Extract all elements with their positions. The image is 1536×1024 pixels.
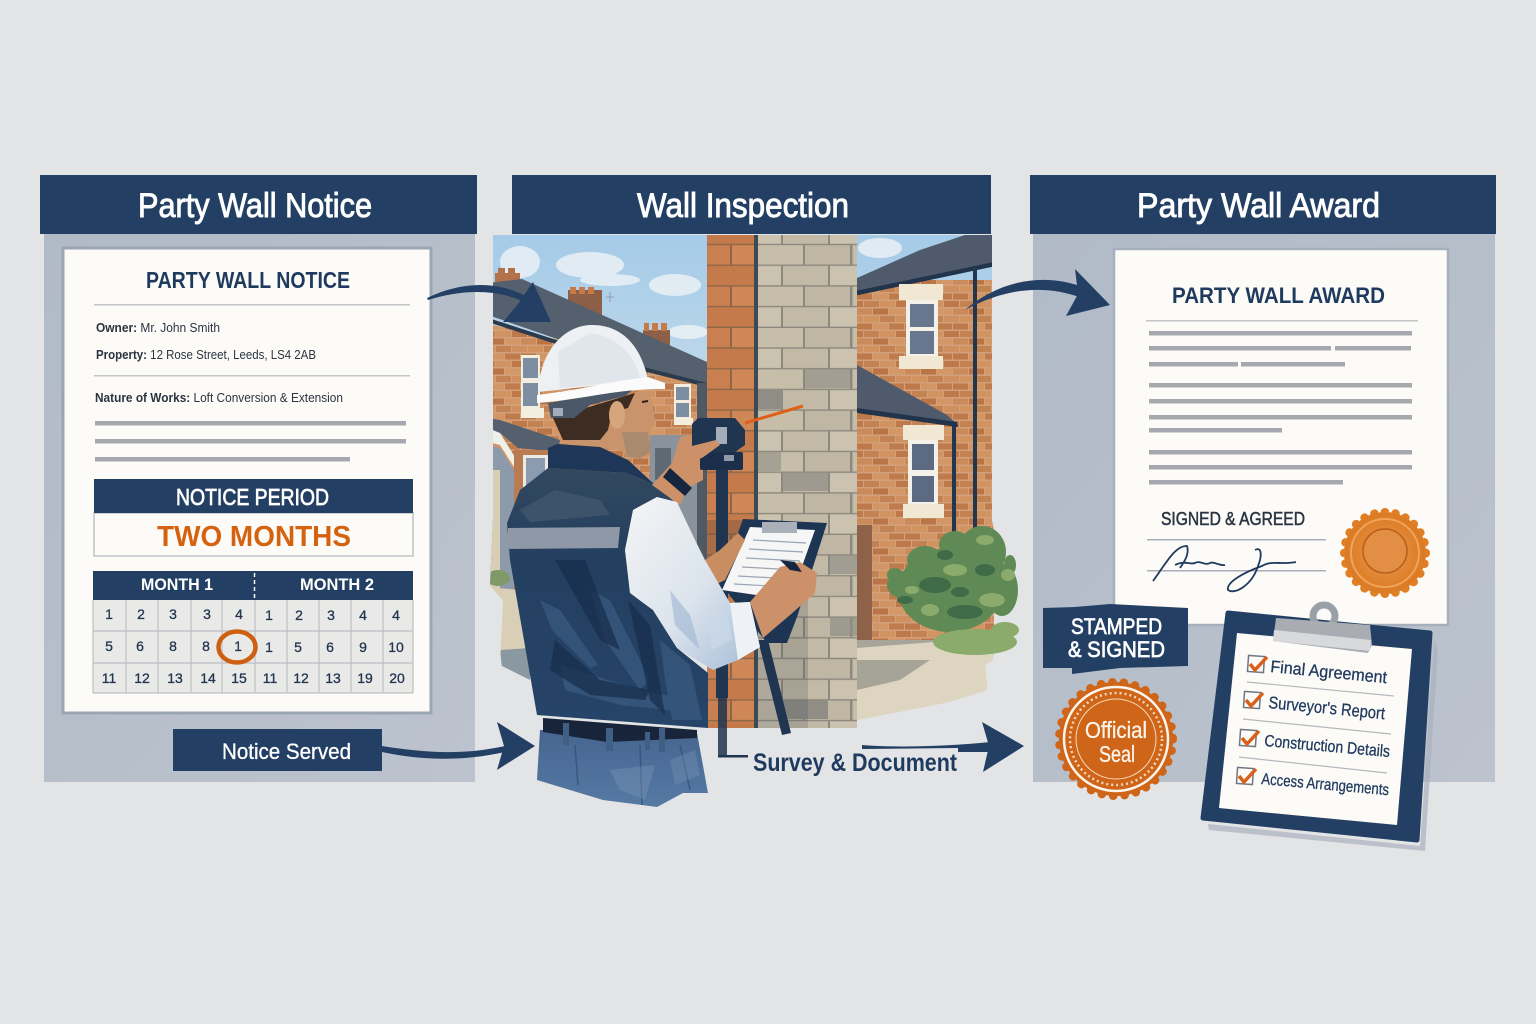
arrow: survey to award — [862, 722, 1024, 772]
calendar: 4 — [392, 607, 400, 623]
calendar: 13 — [167, 670, 183, 686]
hard hat — [537, 325, 665, 403]
calendar: 15 — [231, 670, 247, 686]
calendar: 6 — [136, 638, 144, 654]
calendar: 2 — [137, 606, 145, 622]
calendar: 5 — [105, 638, 113, 654]
illustration: wall inspection scene — [485, 235, 1019, 807]
right forearm and hand — [750, 560, 817, 638]
calendar: 10 — [388, 639, 404, 655]
left hand on clipboard — [705, 533, 745, 585]
notice period box — [94, 479, 413, 556]
checklist item: Construction Details — [1239, 729, 1391, 761]
heading: Party Wall Notice: Party Wall Notice — [138, 187, 372, 225]
calendar: 2 — [295, 607, 303, 623]
award title: PARTY WALL AWARD — [1172, 283, 1385, 308]
heading: Wall Inspection: Wall Inspection — [637, 187, 849, 225]
calendar: 9 — [359, 639, 367, 655]
torso vest — [507, 444, 708, 728]
surveyor figure — [507, 325, 827, 807]
house: left terrace — [486, 268, 707, 680]
checklist item: Surveyor's Report: Surveyor's Report — [1268, 693, 1386, 723]
arrow: notice served to inspection — [382, 722, 535, 770]
panel: award background — [1033, 234, 1495, 782]
arrow: inspection to award — [965, 269, 1110, 316]
forearm and hand holding camera — [652, 432, 718, 505]
reflective stripe — [508, 527, 620, 549]
calendar: 3 — [327, 607, 335, 623]
placeholder text bars — [95, 421, 406, 462]
checklist dividers — [1239, 682, 1394, 773]
calendar: 6 — [326, 639, 334, 655]
notice period box: TWO MONTHS — [157, 521, 351, 553]
checklist item: Surveyor's Report — [1243, 691, 1386, 723]
document title: PARTY WALL NOTICE — [146, 267, 350, 293]
calendar: 1 — [234, 638, 242, 654]
heading: Party Wall Award — [1030, 175, 1496, 234]
wall: brick and block party wall — [707, 235, 857, 730]
clipboard clip — [1273, 605, 1372, 653]
calendar: 8 — [202, 638, 210, 654]
calendar: 3 — [169, 606, 177, 622]
clipboard held by surveyor — [720, 519, 827, 643]
checklist item: Access Arrangements: Access Arrangements — [1261, 771, 1390, 799]
notice period box: NOTICE PERIOD — [176, 484, 329, 510]
camera — [688, 418, 745, 470]
house: right with windows — [857, 235, 995, 720]
clipboard checklist — [1203, 605, 1438, 851]
collar — [548, 444, 655, 485]
tag: Stamped & Signed: STAMPED — [1071, 614, 1162, 639]
tag: Notice Served — [173, 729, 382, 771]
heading: Wall Inspection — [512, 175, 991, 234]
official seal: Seal — [1099, 741, 1135, 767]
head — [548, 388, 655, 458]
label: Survey & Document: Survey & Document — [753, 749, 958, 777]
clouds — [500, 238, 902, 339]
wristband — [663, 468, 692, 496]
property line: Property: 12 Rose Street, Leeds, LS4 2AB — [96, 348, 316, 362]
tag: Stamped & Signed: & SIGNED — [1068, 637, 1165, 662]
heading: Party Wall Notice — [40, 175, 477, 234]
hard hat band — [548, 388, 635, 418]
gold seal — [1344, 512, 1426, 594]
tripod — [716, 470, 791, 758]
pants — [537, 730, 708, 807]
heading: Party Wall Award: Party Wall Award — [1137, 187, 1380, 225]
bush — [887, 526, 1019, 655]
highlighted date circle — [218, 632, 256, 662]
calendar: 13 — [325, 670, 341, 686]
checklist item: Construction Details: Construction Details — [1264, 732, 1391, 761]
arrow: notice to inspection — [427, 282, 551, 322]
calendar: 11 — [263, 670, 277, 686]
checklist item: Final Agreement: Final Agreement — [1270, 657, 1388, 687]
infographic canvas — [40, 175, 1496, 851]
calendar: 12 — [134, 670, 150, 686]
calendar: 19 — [357, 670, 373, 686]
owner line: Owner: Mr. John Smith — [96, 321, 220, 335]
calendar: 11 — [102, 670, 116, 686]
official seal — [1059, 682, 1173, 796]
calendar: 20 — [389, 670, 405, 686]
award text bars — [1149, 331, 1412, 484]
laser beam — [745, 406, 803, 423]
tag: Stamped & Signed — [1043, 604, 1188, 674]
tag: Notice Served: Notice Served — [222, 739, 351, 764]
calendar: 12 — [293, 670, 309, 686]
signed and agreed label: SIGNED & AGREED — [1161, 509, 1305, 529]
calendar — [93, 571, 413, 693]
calendar: MONTH 2 — [300, 576, 374, 594]
checklist item: Access Arrangements — [1236, 767, 1390, 799]
document: party wall award — [1114, 249, 1448, 625]
calendar: 4 — [359, 607, 367, 623]
calendar: 1 — [105, 606, 113, 622]
calendar: 5 — [294, 639, 302, 655]
calendar: MONTH 1 — [141, 576, 213, 594]
calendar: 4 — [235, 606, 243, 622]
calendar: 1 — [265, 639, 273, 655]
calendar: 8 — [169, 638, 177, 654]
nature of works line: Nature of Works: Loft Conversion & Extension — [95, 391, 343, 405]
calendar: 1 — [265, 607, 273, 623]
calendar: 14 — [200, 670, 216, 686]
sky — [493, 235, 992, 362]
panel: notice background — [44, 234, 475, 782]
belt — [543, 718, 697, 752]
calendar: 3 — [203, 606, 211, 622]
document: party wall notice — [63, 248, 431, 713]
signature — [1153, 546, 1296, 591]
official seal: Official — [1085, 717, 1147, 743]
shirt sleeve — [625, 497, 760, 670]
